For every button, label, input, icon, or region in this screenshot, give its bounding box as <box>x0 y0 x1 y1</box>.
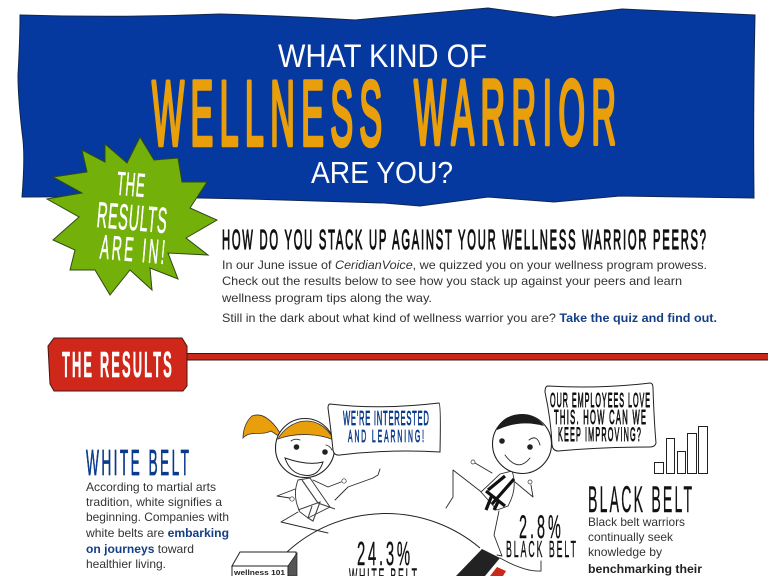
text block: black belt <box>588 516 702 576</box>
speech bubble: white belt: AND LEARNING! <box>348 426 424 446</box>
starburst badge: the results are in: THE <box>115 166 146 205</box>
stat: white belt percent: 24.3% <box>357 537 410 573</box>
panel: blue title banner <box>18 8 755 206</box>
title: what kind of: WHAT KIND OF <box>278 38 487 74</box>
icon: wellness 101 book <box>232 552 297 576</box>
intro text block: Still in the dark about what kind of wellness warrior you are? Take the quiz and find out. <box>222 312 717 325</box>
text block: black belt: continually seek <box>588 531 673 544</box>
speech bubble: white belt <box>328 403 440 455</box>
text block: black belt: Black belt warriors <box>588 516 685 529</box>
stat: black belt percent: 2.8% <box>519 511 561 546</box>
text block: black belt: knowledge by <box>588 546 662 559</box>
title: wellness warrior: WELLNESS <box>152 61 382 165</box>
intro text block <box>221 259 717 325</box>
intro text block: wellness program tips along the way. <box>221 292 432 305</box>
illustration: white belt girl <box>243 415 380 533</box>
illustration: black belt boy <box>446 414 552 556</box>
heading: black belt: BLACK BELT <box>588 479 692 520</box>
speech bubble: black belt <box>545 383 656 451</box>
speech bubble: white belt: WE'RE INTERESTED <box>343 408 429 430</box>
starburst badge: the results are in <box>47 137 217 295</box>
text block: white belt: on journeys toward <box>86 543 194 556</box>
text block: white belt: tradition, white signifies a <box>86 496 223 509</box>
starburst badge: the results are in: ARE IN! <box>99 230 166 272</box>
text block: white belt <box>85 481 229 571</box>
text block: white belt: white belts are embarking <box>85 527 229 540</box>
starburst badge: the results are in: RESULTS <box>95 194 169 241</box>
section bar: red rule <box>186 354 768 360</box>
text block: white belt: According to martial arts <box>86 481 216 494</box>
intro text block: Check out the results below to see how you stack up against your peers and learn <box>222 275 682 288</box>
text block: white belt: beginning. Companies with <box>86 511 229 524</box>
stat: black belt percent <box>506 511 576 562</box>
section tag: the results: THE RESULTS <box>62 345 172 385</box>
heading: how do you stack up: HOW DO YOU STACK UP AGAINST YOUR WELLNESS WARRIOR PEERS? <box>222 224 706 256</box>
speech bubble: black belt: KEEP IMPROVING? <box>558 425 641 446</box>
heading: white belt: WHITE BELT <box>86 442 189 483</box>
stat: black belt percent: BLACK BELT <box>506 536 576 562</box>
speech bubble: black belt: OUR EMPLOYEES LOVE <box>550 390 650 412</box>
speech bubble: black belt: THIS. HOW CAN WE <box>554 407 646 429</box>
text block: white belt: healthier living. <box>86 558 166 571</box>
text block: black belt: benchmarking their <box>588 563 702 576</box>
title: are you: ARE YOU? <box>311 155 453 190</box>
icon: rising bar chart <box>654 426 708 474</box>
wheel chart: results <box>287 514 541 576</box>
intro text block: In our June issue of CeridianVoice , we quizzed you on your wellness program prowess. <box>222 259 707 272</box>
title: wellness warrior: WARRIOR <box>414 60 616 164</box>
title: wellness warrior <box>152 60 616 165</box>
section tag: the results <box>48 338 187 391</box>
